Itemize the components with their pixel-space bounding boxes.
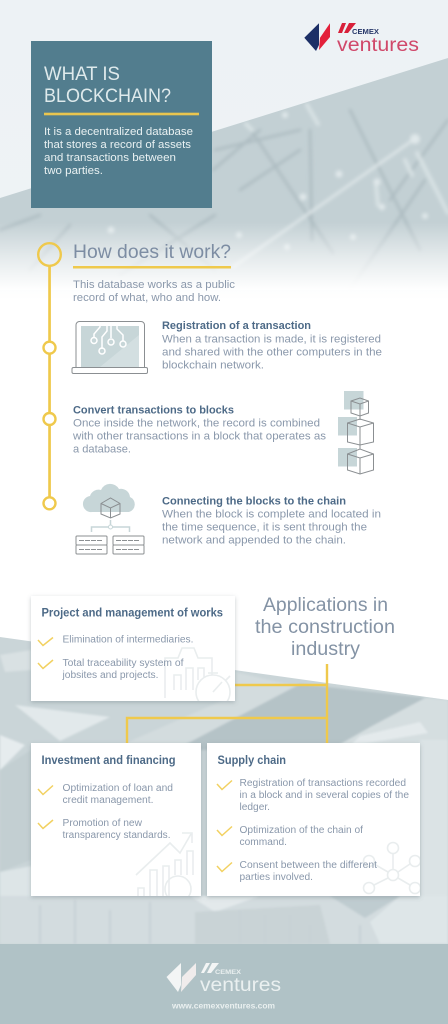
logo: cemex ventures colour: CEMEX <box>352 29 379 36</box>
heading: applications in the construction industry: Applications in <box>263 595 388 616</box>
panel: supply chain: parties involved. <box>240 872 313 883</box>
text: connecting the blocks to the chain <box>162 495 381 546</box>
text: definition <box>44 126 193 177</box>
background: steel lattice photo <box>0 58 448 290</box>
text: registration of a transaction: and shared with the other computers in the <box>162 346 382 358</box>
icon: cloud and servers <box>76 484 144 554</box>
text: connecting the blocks to the chain: network and appended to the chain. <box>162 534 346 546</box>
panel: investment and financing: transparency standards. <box>62 830 170 841</box>
text: registration of a transaction <box>162 320 382 371</box>
panel: supply chain: command. <box>240 837 287 848</box>
panel: supply chain: Registration of transactions recorded <box>240 778 406 789</box>
panel: what is blockchain <box>31 41 212 208</box>
icon: clipboard and stopwatch watermark <box>165 648 230 709</box>
background: concrete photo band <box>0 630 448 944</box>
footer <box>0 944 448 1024</box>
logo: cemex ventures white: CEMEX <box>215 969 242 976</box>
text: definition: two parties. <box>44 165 103 177</box>
check: supply chain bullets <box>217 780 232 872</box>
panel: investment and financing: credit management. <box>62 795 154 806</box>
text: connecting the blocks to the chain: the time sequence, it is sent through the <box>162 522 367 534</box>
text: definition: and transactions between <box>44 152 176 164</box>
panel: investment and financing: Investment and financing <box>42 755 176 767</box>
icon: network hub watermark <box>364 842 420 894</box>
text: how it works intro: record of what, who and how. <box>73 292 221 304</box>
icon: stacked blocks <box>338 391 374 474</box>
text: website: www.cemexventures.com <box>171 1002 275 1010</box>
text: how it works intro <box>73 279 236 304</box>
connector lines <box>127 664 327 743</box>
text: convert transactions to blocks <box>72 404 327 455</box>
panel: investment and financing: Optimization of loan and <box>62 783 173 794</box>
logo: cemex ventures white <box>166 963 281 996</box>
heading: what is blockchain: BLOCKCHAIN? <box>44 86 171 107</box>
panel: investment and financing: Promotion of new <box>62 818 143 829</box>
text: registration of a transaction: Registration of a transaction <box>162 320 311 332</box>
text: how it works intro: This database works as a public <box>73 279 236 291</box>
panel: project and management of works: Project and management of works <box>42 608 223 620</box>
text: convert transactions to blocks: Once inside the network, the record is combined <box>73 417 320 429</box>
heading: applications in the construction industry <box>255 595 395 660</box>
text: convert transactions to blocks: a database. <box>73 443 131 455</box>
logo: cemex ventures colour: ventures <box>337 35 419 56</box>
text: definition: It is a decentralized database <box>44 126 193 138</box>
text: convert transactions to blocks: Convert transactions to blocks <box>73 404 234 416</box>
panel: supply chain: in a block and in several copies of the <box>240 790 409 801</box>
panel: investment and financing <box>31 743 201 902</box>
text: definition: that stores a record of assets <box>44 139 192 151</box>
heading: applications in the construction industry: the construction <box>255 617 395 638</box>
heading: what is blockchain <box>44 64 171 107</box>
text: registration of a transaction: blockchain network. <box>162 359 264 371</box>
background: top tint <box>0 0 448 300</box>
panel: project and management of works: Total traceability system of <box>62 658 184 669</box>
panel: supply chain: Supply chain <box>218 755 286 767</box>
heading: how does it work: How does it work? <box>73 242 231 263</box>
panel: supply chain: Consent between the different <box>240 860 377 871</box>
check: investment bullets <box>38 786 53 828</box>
icon: growth chart watermark <box>136 833 193 902</box>
panel: supply chain <box>207 743 420 896</box>
logo: cemex ventures white: ventures <box>200 975 281 996</box>
panel: project and management of works: jobsites and projects. <box>61 670 159 681</box>
panel: project and management of works <box>31 596 235 709</box>
heading: applications in the construction industry: industry <box>291 639 361 660</box>
heading: what is blockchain: WHAT IS <box>44 64 120 85</box>
text: connecting the blocks to the chain: When the block is complete and located in <box>162 508 381 520</box>
logo: cemex ventures colour <box>304 23 419 56</box>
timeline <box>38 243 61 509</box>
text: registration of a transaction: When a transaction is made, it is registered <box>162 333 381 345</box>
panel: project and management of works: Elimination of intermediaries. <box>62 634 194 646</box>
check: project bullets <box>38 638 53 668</box>
text: convert transactions to blocks: with other transactions in a block that operates as <box>72 430 327 442</box>
icon: laptop circuit <box>72 322 148 374</box>
text: connecting the blocks to the chain: Connecting the blocks to the chain <box>162 495 346 507</box>
panel: supply chain: ledger. <box>240 802 270 813</box>
panel: supply chain: Optimization of the chain of <box>240 825 363 836</box>
